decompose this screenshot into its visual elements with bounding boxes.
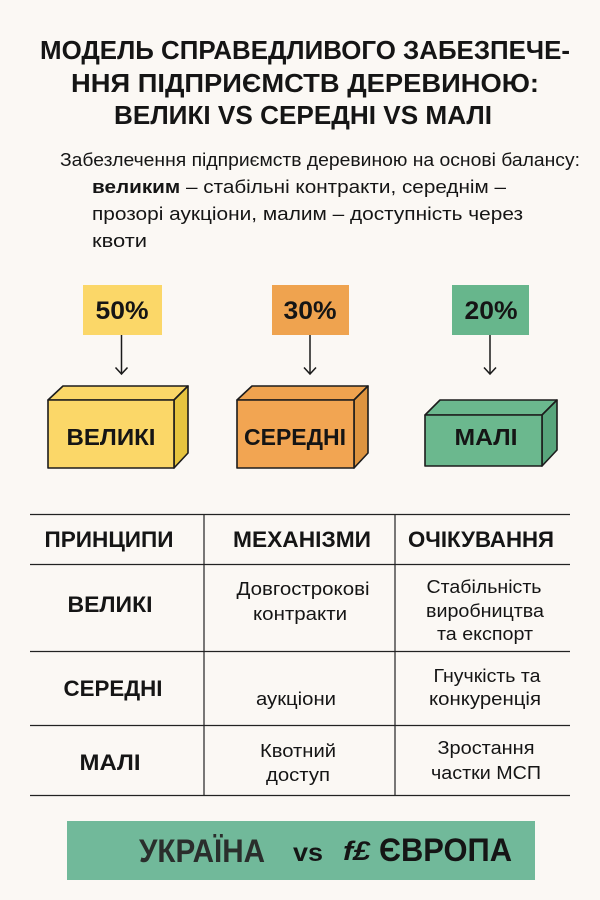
block: medium bbox=[237, 386, 368, 468]
intro text: Забезлечення підприємств деревиною на основі балансу: bbox=[60, 149, 580, 170]
icon: currency-like mark: f£ bbox=[343, 836, 371, 866]
row: large: виробництва bbox=[426, 600, 545, 621]
banner: Ukraine vs Europe bbox=[67, 821, 535, 880]
title: МОДЕЛЬ СПРАВЕДЛИВОГО ЗАБЕЗПЕЧЕ- bbox=[40, 35, 570, 65]
block: large bbox=[48, 386, 188, 468]
block: small: МАЛІ bbox=[454, 424, 518, 450]
intro text: квоти bbox=[92, 230, 147, 251]
intro text: великим – стабільні контракти, середнім – bbox=[92, 176, 507, 197]
row: large: Довгострокові bbox=[236, 578, 370, 599]
table bbox=[30, 514, 570, 796]
table header: ОЧІКУВАННЯ bbox=[408, 527, 554, 552]
label: 20%: 20% bbox=[464, 297, 518, 325]
column: medium 30% bbox=[237, 285, 368, 468]
label: 30% bbox=[272, 285, 349, 335]
row: medium: Гнучкість та bbox=[434, 665, 541, 686]
label: 50% bbox=[83, 285, 162, 335]
title bbox=[40, 35, 570, 130]
row: small: МАЛІ bbox=[80, 750, 140, 775]
column: large 50% bbox=[48, 285, 188, 468]
title: ННЯ ПІДПРИЄМСТВ ДЕРЕВИНОЮ: bbox=[71, 68, 539, 98]
row: large: та експорт bbox=[437, 623, 534, 644]
row: medium: СЕРЕДНІ bbox=[64, 676, 162, 701]
title: ВЕЛИКІ VS СЕРЕДНІ VS МАЛІ bbox=[114, 100, 492, 130]
block: large: ВЕЛИКІ bbox=[66, 424, 156, 450]
block: small bbox=[425, 400, 557, 466]
banner: Ukraine vs Europe: УКРАЇНА bbox=[139, 833, 265, 869]
column: small 20% bbox=[425, 285, 557, 466]
row: small: частки МСП bbox=[431, 762, 541, 783]
table header bbox=[44, 527, 554, 552]
row: large: контракти bbox=[253, 603, 347, 624]
row: small bbox=[80, 737, 541, 785]
row: medium: конкуренція bbox=[429, 688, 541, 709]
label: 30%: 30% bbox=[284, 297, 336, 325]
row: large: Стабільність bbox=[426, 576, 542, 597]
table header: МЕХАНІЗМИ bbox=[233, 527, 371, 552]
banner: Ukraine vs Europe: ЄВРОПА bbox=[379, 832, 512, 868]
arrow: 30% to medium bbox=[304, 335, 316, 374]
arrow: 20% to small bbox=[484, 335, 496, 374]
label: 20% bbox=[452, 285, 529, 335]
row: medium bbox=[64, 665, 541, 709]
row: small: Зростання bbox=[438, 737, 534, 758]
row: small: Квотний bbox=[260, 740, 336, 761]
table header: ПРИНЦИПИ bbox=[44, 527, 174, 552]
arrow: 50% to large bbox=[116, 335, 128, 374]
row: large: ВЕЛИКІ bbox=[68, 592, 152, 617]
intro text: прозорі аукціони, малим – доступність через bbox=[92, 203, 523, 224]
intro text bbox=[60, 149, 580, 251]
row: large bbox=[68, 576, 545, 644]
block: medium: СЕРЕДНІ bbox=[244, 424, 346, 450]
label: 50%: 50% bbox=[96, 297, 148, 325]
row: medium: аукціони bbox=[256, 688, 336, 709]
banner: Ukraine vs Europe: vs bbox=[293, 839, 323, 867]
row: small: доступ bbox=[266, 764, 330, 785]
